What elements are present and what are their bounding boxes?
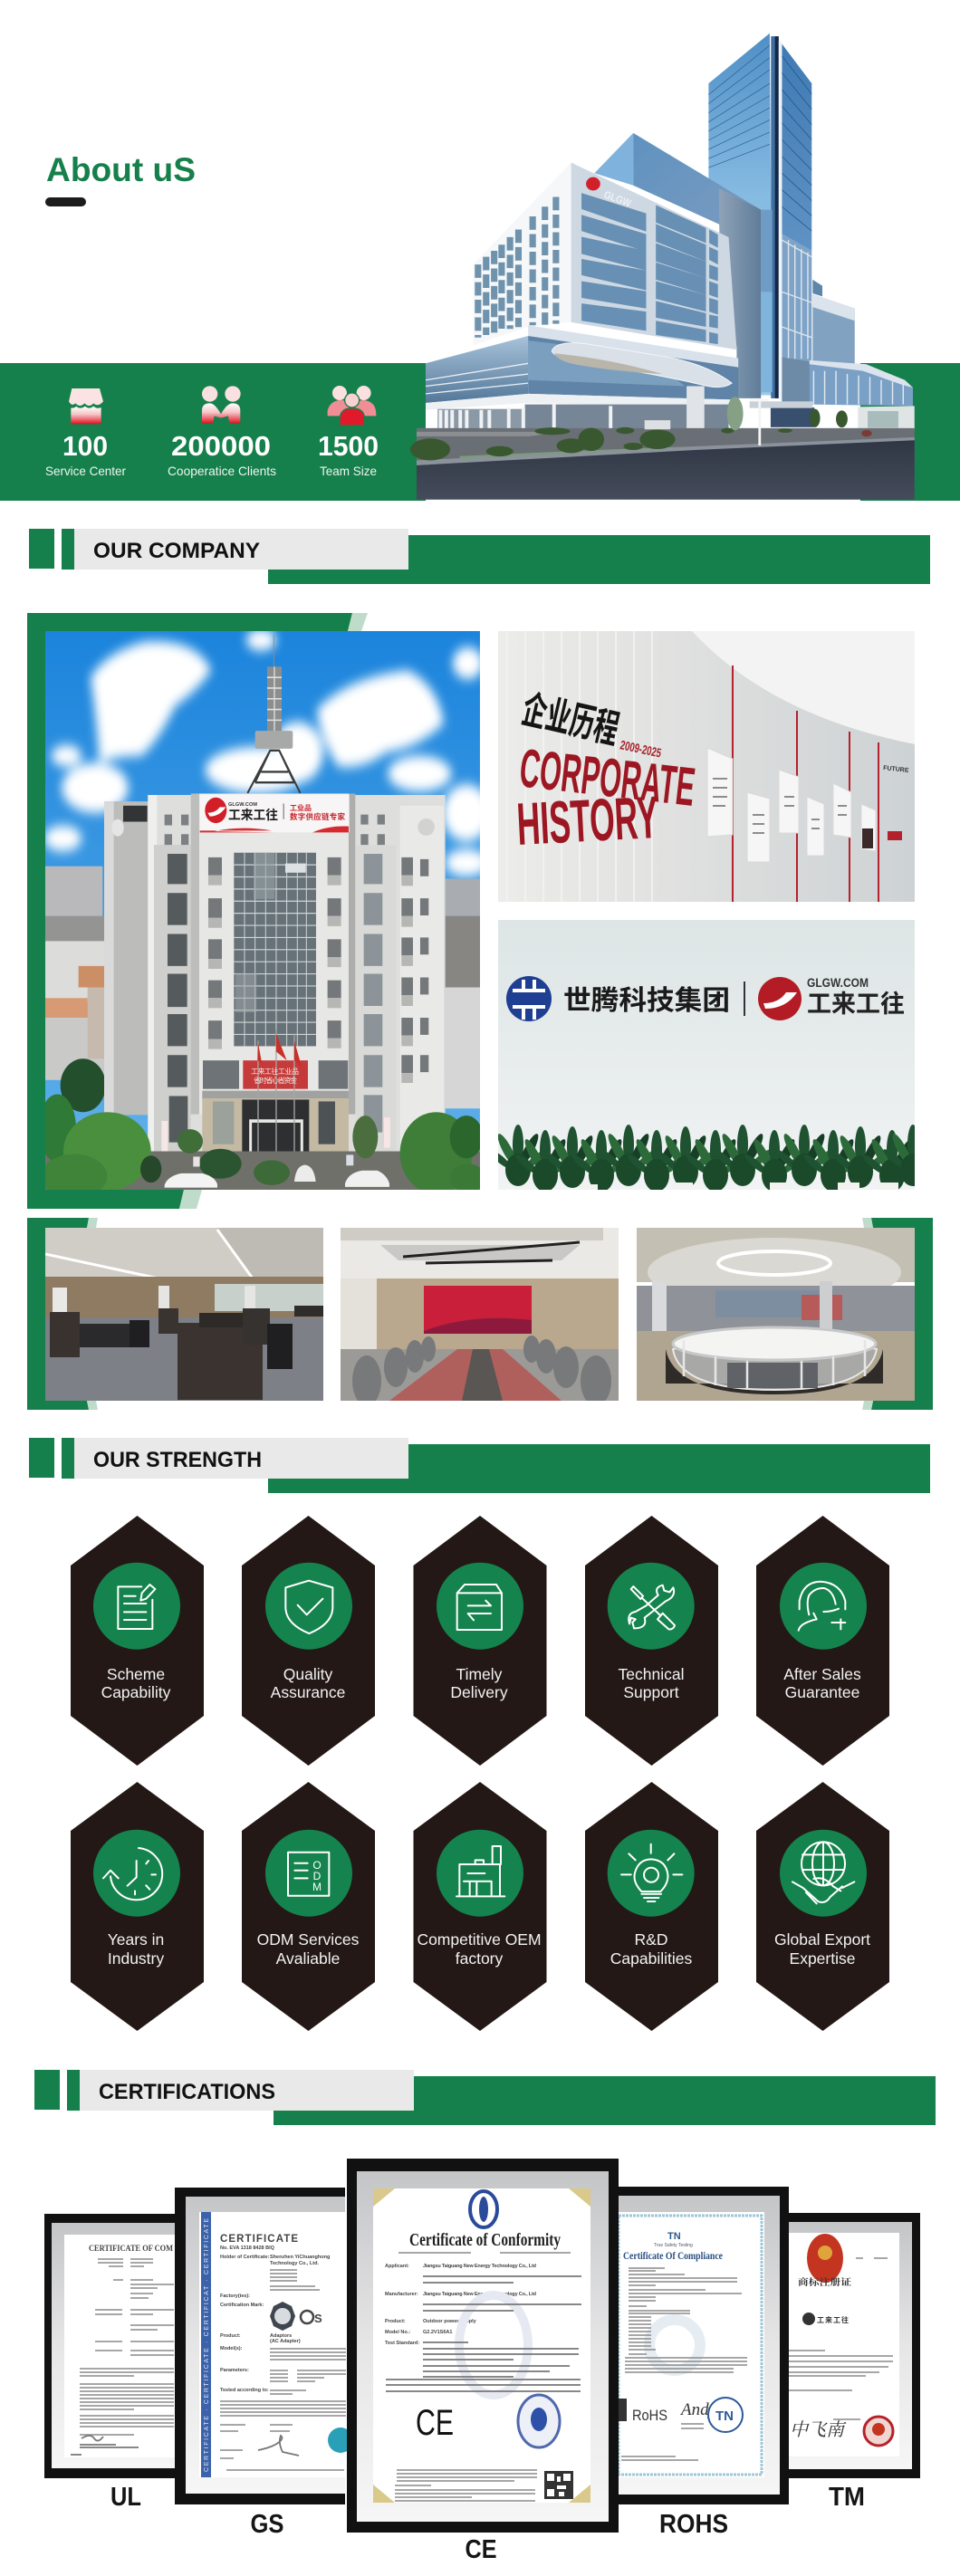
certificate: GS: No. EVA 1318 8428 BIQ [220, 2246, 275, 2251]
photo: corporate history wall: HISTORY [515, 783, 660, 857]
panel: Technical Support [585, 1516, 718, 1766]
photo: company headquarters tower: 数字供应链专家 [290, 812, 345, 821]
certificate: GS [175, 2188, 353, 2504]
icon: certification emblem [470, 2191, 497, 2227]
certificate: TM: 商标注册证 [798, 2276, 851, 2288]
certificate: ROHS: TN [667, 2231, 681, 2242]
icon: crossed tools [629, 1585, 675, 1629]
certificate: ROHS [619, 2187, 789, 2504]
panel: Technical Support: Technical [619, 1665, 684, 1683]
panel: Competitive OEM factory: Competitive OEM [417, 1930, 542, 1949]
certificate: GS: Parameters: [220, 2368, 249, 2373]
icon: box with exchange arrows [457, 1585, 502, 1630]
certificate: GS: Holder of Certificate: [220, 2255, 270, 2260]
photo: company logo wall: GLGW.COM [807, 975, 869, 990]
certificate: CE: Jiangsu Taiguang New Energy Technology Co., Ltd [423, 2292, 536, 2297]
certificate: ROHS: RoHS [632, 2407, 667, 2424]
heading: OUR STRENGTH [29, 1438, 930, 1493]
icon: two people [202, 386, 241, 424]
certificate: CE: Certificate of Conformity [409, 2230, 561, 2250]
icon: TUV mark [270, 2302, 322, 2331]
photo: corporate history wall: 2009-2025 [619, 737, 663, 761]
photo: company logo wall: 工来工往 [807, 991, 905, 1018]
photo: company headquarters tower [39, 629, 490, 1198]
stat: 200000 cooperation clients: Cooperatice Clients [168, 464, 276, 478]
stat: 100 service center: Service Center [45, 464, 126, 478]
panel: Quality Assurance: Quality [283, 1665, 332, 1683]
icon: headset agent with plus [799, 1582, 845, 1631]
panel: After Sales Guarantee: After Sales [783, 1665, 861, 1683]
certificate: GS: Technology Co., Ltd. [270, 2261, 319, 2266]
certificate: GS: Shenzhen YiChuanghong [270, 2255, 330, 2260]
icon: QR code [544, 2471, 573, 2499]
stat: 1500 team size: Team Size [320, 464, 377, 478]
photo: corporate history wall: CORPORATE [517, 737, 698, 818]
label: ROHS: ROHS [659, 2510, 728, 2539]
panel: Years in Industry: Years in [108, 1930, 164, 1949]
certificate: GS: Adaptors [270, 2333, 292, 2339]
icon: ODM document [288, 1853, 329, 1896]
panel: ODM Services Avaliable: O [312, 1859, 322, 1872]
panel: Global Export Expertise: Expertise [790, 1949, 855, 1968]
stat: 1500 team size [318, 386, 379, 478]
panel: Timely Delivery [413, 1516, 547, 1766]
certificate: CE: Test Standard: [385, 2341, 419, 2346]
green stats band [0, 363, 960, 501]
certificate: GS: Tested according to: [220, 2388, 269, 2393]
stat: 100 service center [45, 388, 126, 478]
panel: ODM Services Avaliable [242, 1782, 375, 2031]
green frame around office photos [27, 1218, 933, 1410]
icon: document with pen [118, 1585, 155, 1629]
label: GS: GS [250, 2510, 284, 2539]
certificate: GS: Model(s): [220, 2346, 243, 2351]
certificate: TM [789, 2213, 920, 2478]
certificate: CE: CE [416, 2403, 454, 2443]
heading: OUR COMPANY [29, 529, 930, 584]
panel: ODM Services Avaliable: Avaliable [276, 1949, 340, 1968]
photo: corporate history wall [498, 631, 915, 905]
heading: OUR STRENGTH: OUR STRENGTH [93, 1448, 262, 1472]
photo: lobby with circular railing [637, 1228, 915, 1401]
panel: Scheme Capability [71, 1516, 204, 1766]
photo: company headquarters tower: GLGW.COM [228, 802, 257, 808]
panel: Timely Delivery: Delivery [450, 1683, 508, 1701]
panel: ODM Services Avaliable: D [313, 1870, 322, 1882]
label: UL: UL [110, 2483, 141, 2512]
panel: ODM Services Avaliable: ODM Services [257, 1930, 360, 1949]
icon: blue group logo [506, 976, 552, 1021]
certificate: CE: Model No.: [385, 2330, 410, 2335]
title: About uS: About uS [46, 151, 196, 188]
icon: round stamp [518, 2395, 560, 2447]
certificate: GS: (AC Adapter) [270, 2339, 301, 2344]
certificate: TM: 中飞南 [790, 2420, 847, 2440]
stat: 1500 team size: 1500 [318, 430, 379, 462]
panel: Competitive OEM factory: factory [456, 1949, 504, 1968]
certificate: GS: CERTIFICATE [220, 2234, 298, 2245]
icon: clock with return arrow [103, 1848, 162, 1900]
panel: After Sales Guarantee: Guarantee [785, 1683, 859, 1701]
certificate: ROHS: Andy [679, 2400, 717, 2419]
panel: Global Export Expertise [756, 1782, 889, 2031]
stat: 200000 cooperation clients [168, 386, 276, 478]
certificate: TM: 工来工往 [817, 2315, 849, 2324]
photo: meeting room with red screen [341, 1228, 619, 1406]
heading: OUR COMPANY: OUR COMPANY [93, 539, 260, 563]
title: About uS [45, 151, 196, 206]
photo: corporate history wall: FUTURE [883, 765, 909, 774]
panel: R&D Capabilities [585, 1782, 718, 2031]
icon: storefront [69, 388, 103, 424]
panel: Years in Industry [71, 1782, 204, 2031]
certificate: GS: Product: [220, 2333, 241, 2339]
label: TM: TM [829, 2483, 865, 2512]
photo: open office [45, 1228, 323, 1401]
panel: Quality Assurance [242, 1516, 375, 1766]
certificate: ROHS: TN [715, 2408, 734, 2424]
stat: 200000 cooperation clients: 200000 [171, 430, 271, 462]
panel: Years in Industry: Industry [108, 1949, 164, 1968]
photo: company headquarters tower: 省时省心省资金 [254, 1076, 297, 1085]
icon: light bulb with gear [621, 1844, 682, 1901]
photo: company logo wall: 世腾科技集团 [563, 986, 730, 1016]
panel: R&D Capabilities: Capabilities [610, 1949, 692, 1968]
icon: red company logo [758, 977, 802, 1020]
certificate: CE: Outdoor power supply [423, 2319, 477, 2324]
icon: factory [456, 1846, 504, 1896]
icon: TUV mark: S [314, 2312, 322, 2325]
certificate: CE [347, 2159, 619, 2533]
panel: Scheme Capability: Scheme [107, 1665, 165, 1683]
panel: Global Export Expertise: Global Export [774, 1930, 870, 1949]
stat: 100 service center: 100 [62, 430, 108, 462]
photo: company headquarters tower: 工来工往 [228, 808, 278, 822]
green frame around main photos [27, 613, 368, 1209]
panel: Technical Support: Support [623, 1683, 679, 1701]
certificate: ROHS: Certificate Of Compliance [623, 2249, 724, 2262]
hero image: company building: GLGW [602, 190, 632, 209]
photo: company headquarters tower: 工业品 [290, 803, 312, 812]
certificate: CE: Manufacturer: [385, 2292, 418, 2297]
certificate: CE: G2.2V1S6A1 [423, 2330, 452, 2335]
icon: shield with check [285, 1581, 332, 1633]
icon: team of people [328, 386, 376, 426]
heading: CERTIFICATIONS [34, 2070, 936, 2125]
panel: R&D Capabilities: R&D [635, 1930, 667, 1949]
certificate: CE: Jiangsu Taiguang New Energy Technology Co., Ltd [423, 2264, 536, 2269]
panel: Competitive OEM factory [413, 1782, 547, 2031]
hero image: company building [410, 34, 915, 500]
certificate: GS: CERTIFICATE · CERTIFICATE · CERTIFICAT · CERTIFICATE [204, 2218, 210, 2472]
certificate: ROHS: True Safety Testing [654, 2243, 693, 2248]
label: CE: CE [466, 2535, 496, 2564]
panel: Quality Assurance: Assurance [271, 1683, 345, 1701]
photo: company headquarters tower: 工来工往工业品 [251, 1067, 299, 1076]
heading: CERTIFICATIONS: CERTIFICATIONS [99, 2080, 275, 2104]
certificate: UL: CERTIFICATE OF COM [89, 2245, 173, 2254]
certificate: CE: Product: [385, 2319, 406, 2324]
certificate: UL [44, 2214, 175, 2478]
certificate: GS: Certification Mark: [220, 2303, 264, 2308]
panel: Scheme Capability: Capability [101, 1683, 171, 1701]
panel: After Sales Guarantee [756, 1516, 889, 1766]
certificate: GS: Factory(ies): [220, 2294, 250, 2299]
icon: globe with handshake [792, 1842, 854, 1903]
photo: corporate history wall: 企业历程 [518, 686, 623, 752]
certificate: CE: Applicant: [385, 2264, 409, 2269]
panel: ODM Services Avaliable: M [312, 1881, 322, 1893]
panel: Timely Delivery: Timely [456, 1665, 503, 1683]
photo: company logo wall [486, 920, 945, 1192]
